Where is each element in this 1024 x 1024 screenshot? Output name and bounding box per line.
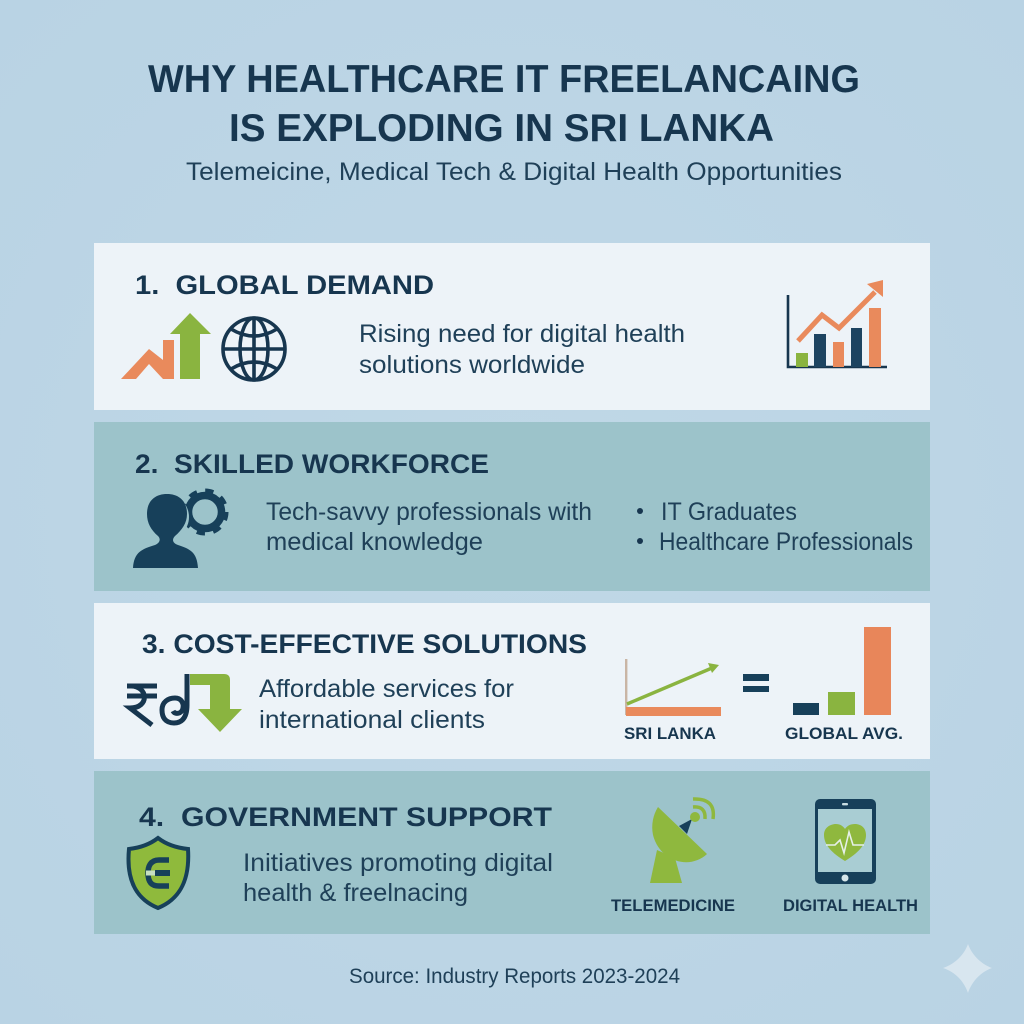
icon: satellite dish — [650, 799, 713, 883]
text: global demand description — [359, 320, 685, 379]
title: IS EXPLODING IN SRI LANKA — [229, 107, 774, 150]
text: government description — [243, 849, 553, 907]
heading: global demand: 1. GLOBAL DEMAND — [135, 270, 434, 300]
list: workforce groups: IT Graduates — [661, 498, 797, 526]
icon: currency with down arrow — [127, 674, 242, 732]
heading: government support: 4. GOVERNMENT SUPPORT — [139, 802, 553, 832]
text: skilled workforce description — [266, 498, 592, 556]
icon: globe — [223, 318, 285, 380]
label: telemedicine: TELEMEDICINE — [611, 896, 735, 915]
text: global demand description: Rising need for digital health — [359, 320, 685, 348]
icon: person with gear — [133, 491, 226, 568]
icon: sparkle — [943, 944, 992, 993]
chart: rising bars with arrow — [788, 280, 887, 367]
panel: skilled workforce — [94, 422, 930, 591]
label: digital health: DIGITAL HEALTH — [783, 896, 918, 915]
list: workforce groups — [637, 498, 913, 556]
text: government description: health & freelnacing — [243, 879, 468, 907]
chart: sri lanka: SRI LANKA — [624, 724, 716, 743]
text: cost description — [259, 675, 514, 734]
text: skilled workforce description: medical knowledge — [266, 528, 483, 556]
text: skilled workforce description: Tech-savvy professionals with — [266, 498, 592, 526]
text: cost description: international clients — [259, 706, 485, 734]
panel: global demand — [94, 243, 930, 410]
panel: cost-effective solutions — [94, 603, 930, 759]
title: WHY HEALTHCARE IT FREELANCAING — [148, 58, 860, 101]
panel: government support — [94, 771, 930, 934]
icon: shield — [128, 838, 188, 908]
subtitle: Telemeicine, Medical Tech & Digital Health Opportunities — [186, 158, 842, 186]
text: global demand description: solutions worldwide — [359, 351, 585, 379]
chart: global average: GLOBAL AVG. — [785, 724, 903, 743]
heading: skilled workforce: 2. SKILLED WORKFORCE — [135, 449, 489, 479]
chart: sri lanka — [624, 659, 721, 743]
title — [148, 58, 860, 150]
icon: rising arrows — [121, 313, 211, 379]
chart: global average — [785, 627, 903, 743]
icon: tablet with heart — [815, 799, 876, 884]
heading: cost-effective solutions: 3. COST-EFFECTIVE SOLUTIONS — [142, 629, 587, 659]
text: cost description: Affordable services for — [259, 675, 514, 703]
source note: Source: Industry Reports 2023-2024 — [349, 965, 680, 988]
icon: equals sign — [743, 674, 769, 692]
list: workforce groups: Healthcare Professionals — [659, 528, 913, 556]
text: government description: Initiatives promoting digital — [243, 849, 553, 877]
